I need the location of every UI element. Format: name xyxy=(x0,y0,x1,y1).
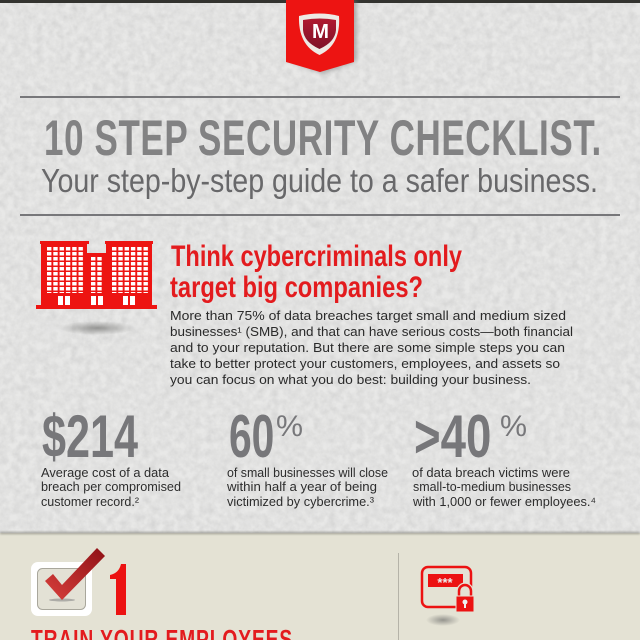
stat: 60%: of small businesses will close xyxy=(227,466,388,480)
column divider xyxy=(398,553,399,640)
top dark strip xyxy=(0,0,640,3)
stat: $214: customer record.² xyxy=(41,495,139,509)
stat: $214: $214 xyxy=(42,404,138,471)
logo ribbon xyxy=(286,0,357,74)
bottom rule xyxy=(20,214,620,216)
icon: office buildings xyxy=(36,241,157,335)
intro paragraph: and to your reputation. But there are some simple steps you can xyxy=(170,340,565,355)
step number 1 xyxy=(110,564,126,615)
heading: target big companies? xyxy=(170,271,423,304)
stat: 60% xyxy=(226,403,388,509)
heading xyxy=(170,240,462,304)
stat: 60%: 60 xyxy=(229,403,274,470)
icon: red checkbox xyxy=(31,548,105,616)
intro paragraph xyxy=(170,308,573,387)
stat: >40%: small-to-medium businesses xyxy=(413,480,571,494)
stat: >40%: with 1,000 or fewer employees.⁴ xyxy=(412,495,596,509)
stat: 60%: within half a year of being xyxy=(226,480,377,494)
lower beige panel xyxy=(0,532,640,640)
intro paragraph: take to better protect your customers, employees, and assets so xyxy=(170,356,560,371)
title: 10 STEP SECURITY CHECKLIST. xyxy=(44,111,601,167)
stat: $214 xyxy=(41,404,181,509)
heading: Think cybercriminals only xyxy=(171,240,462,273)
stat: 60%: % xyxy=(276,410,303,443)
top rule xyxy=(20,96,620,98)
stat: >40%: of data breach victims were xyxy=(412,466,570,480)
stat: 60%: victimized by cybercrime.³ xyxy=(227,495,374,509)
icon: McAfee shield: M xyxy=(312,21,329,43)
stat: >40%: >40 xyxy=(414,404,491,471)
icon: password card with padlock: *** xyxy=(437,575,454,590)
intro paragraph: businesses¹ (SMB), and that can have serious costs—both financial xyxy=(170,324,573,339)
stat: $214: Average cost of a data xyxy=(41,466,169,480)
stat: >40%: % xyxy=(500,410,527,443)
stat: $214: breach per compromised xyxy=(41,480,181,494)
stat: >40% xyxy=(412,404,596,509)
intro paragraph: More than 75% of data breaches target small and medium sized xyxy=(170,308,566,323)
intro paragraph: you can focus on what you do best: building your business. xyxy=(170,372,531,387)
icon: password card with padlock xyxy=(422,567,474,626)
